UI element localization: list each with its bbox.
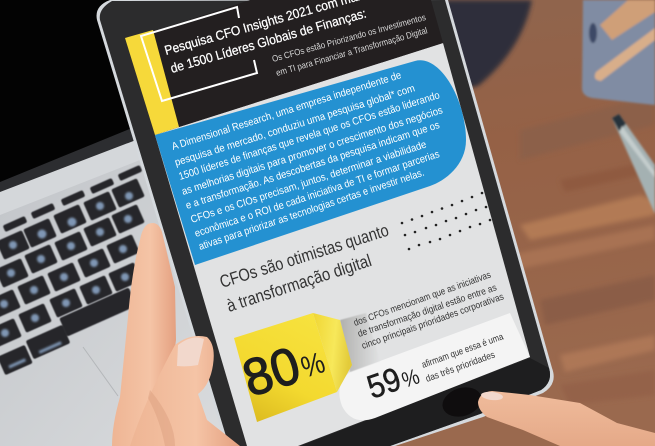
panel: blue intro text: as melhorias digitais para promover o crescimento dos negócios [180,104,444,198]
panel: yellow 80% block [234,313,352,422]
80 percent description: dos CFOs mencionam que as iniciativas [352,270,493,329]
80 percent description: de transformação digital estão entre as [356,282,498,340]
right thumb on tablet [478,391,655,446]
laptop keyboard [0,165,145,375]
yellow accent bar [125,30,179,135]
panel: blue intro text: pesquisa de mercado, conduziu uma pesquisa global* com [173,82,417,169]
heading: à transformação digital [224,250,374,316]
keyboard key glyphs [0,192,133,368]
tablet screen [125,0,530,446]
white title bracket [141,7,257,101]
59 percent value: % [398,364,423,393]
59 percent value: 59 [362,360,405,406]
59 percent description [420,331,506,385]
59 percent description: das três prioridades [424,349,497,385]
pen on desk [612,114,655,214]
dot pattern [401,192,491,250]
icon: home button [439,383,485,421]
icon: thumbnail [481,391,503,401]
panel: blue intro text: ativas para priorizar as tecnologias certas e investir nelas. [197,167,426,253]
59 percent description: afirmam que essa é uma [420,331,506,371]
fold shadow [340,313,380,372]
left hand holding tablet [112,223,240,446]
80 percent value: 80 [236,336,307,408]
panel: blue intro text: econômica e o ROI de cada iniciativa de TI e formar parcerias [193,148,441,240]
panel: blue intro text: e a transformação. As descobertas da pesquisa indicam que os [184,119,441,212]
heading: CFOs são otimistas quanto [217,220,391,292]
panel: blue intro text [155,60,466,265]
blue-gray tray with wooden sticks [582,0,655,105]
subtitle: Os CFOs estão Priorizando os Investimentos [271,12,427,64]
dark round object on desk [440,0,532,90]
panel: blue intro text: CFOs e os CIOs precisam, juntos, determinar a viabilidade [189,138,428,226]
tablet body [97,0,554,446]
panel: blue intro text: 1500 líderes de finanças que revela que os CFOs estão liderando [177,89,441,183]
panel: blue intro text: A Dimensional Research, uma empresa independente de [170,69,403,153]
white stat band [339,313,530,420]
laptop [0,0,240,446]
80 percent description: cinco principais prioridades corporativas [360,291,506,352]
80 percent value: % [297,346,329,385]
panel: black header [152,0,443,127]
title: de 1500 Líderes Globais de Finanças: [169,6,368,76]
subtitle: em TI para Financiar a Transformação Digital [275,25,429,78]
